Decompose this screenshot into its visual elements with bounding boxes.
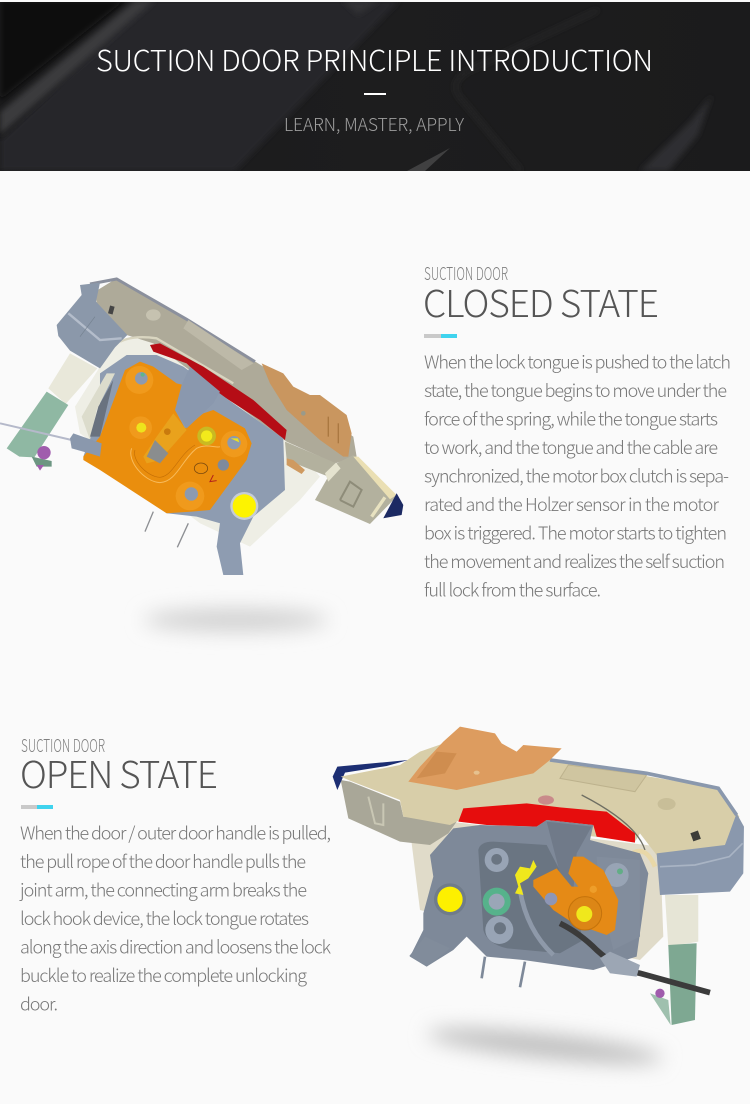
open state paragraph: lock hook device, the lock tongue rotates xyxy=(20,905,309,931)
yellow clip xyxy=(515,860,537,895)
red latch plate xyxy=(150,343,287,440)
white cylinder xyxy=(48,353,97,404)
subtitle: LEARN, MASTER, APPLY xyxy=(284,112,464,137)
title divider xyxy=(364,93,386,95)
navy edge xyxy=(333,760,408,790)
title: SUCTION DOOR PRINCIPLE INTRODUCTION xyxy=(96,38,653,80)
tan connector xyxy=(262,363,352,457)
panel: closed state text xyxy=(423,260,731,603)
open state paragraph: buckle to realize the complete unlocking xyxy=(20,962,307,988)
end cap xyxy=(57,283,127,368)
illustration: closed state latch xyxy=(0,278,403,575)
open state accent bar xyxy=(21,805,53,809)
red latch plate xyxy=(458,803,635,843)
cable clamp xyxy=(600,952,640,977)
closed state paragraph: box is triggered. The motor starts to tighten xyxy=(424,520,727,546)
orange inner tongue xyxy=(143,413,187,463)
left gray side xyxy=(341,780,457,845)
pins xyxy=(145,512,188,547)
closed state paragraph: full lock from the surface. xyxy=(424,577,601,603)
bolt holes xyxy=(125,366,247,510)
closed state paragraph xyxy=(424,349,731,603)
closed state heading: CLOSED STATE xyxy=(423,274,659,328)
open state paragraph: the pull rope of the door handle pulls the xyxy=(20,848,306,874)
handle tab xyxy=(409,937,450,967)
cable end fitting xyxy=(0,423,102,457)
closed state paragraph: to work, and the tongue and the cable are xyxy=(424,434,718,460)
large yellow stud xyxy=(230,492,258,520)
closed state paragraph: the movement and realizes the self suction xyxy=(424,548,725,574)
green post xyxy=(650,943,697,1025)
green post xyxy=(7,392,68,457)
illustration: open state latch xyxy=(333,727,744,1025)
orange lever xyxy=(533,857,618,935)
wedge xyxy=(547,822,592,890)
closed state shadow xyxy=(144,609,328,631)
open state kicker: SUCTION DOOR xyxy=(21,732,105,758)
tan connector xyxy=(408,727,562,790)
closed state paragraph: state, the tongue begins to move under the xyxy=(424,377,727,403)
lower shell xyxy=(285,442,397,524)
drive cable xyxy=(560,923,710,993)
open state paragraph: When the door / outer door handle is pulled, xyxy=(20,820,331,846)
closed state paragraph: When the lock tongue is pushed to the latch xyxy=(424,349,731,375)
purple bolt xyxy=(37,446,51,471)
closed state kicker: SUCTION DOOR xyxy=(424,260,508,286)
closed state accent bar xyxy=(424,334,457,338)
end cap xyxy=(657,813,744,895)
green spring ring xyxy=(483,888,511,916)
large yellow stud xyxy=(434,883,466,915)
top plate xyxy=(95,278,357,464)
gray housing xyxy=(410,820,648,970)
closed state paragraph: synchronized, the motor box clutch is sepa- xyxy=(424,463,729,489)
closed state paragraph: force of the spring, while the tongue starts xyxy=(424,406,718,432)
open state heading: OPEN STATE xyxy=(20,745,218,799)
curved groove xyxy=(131,446,220,483)
open state paragraph xyxy=(19,820,332,1016)
cylinder xyxy=(665,895,698,947)
pins xyxy=(482,957,525,987)
pale inner carrier xyxy=(75,335,320,547)
panel: open state text xyxy=(19,732,332,1016)
gray wedge xyxy=(175,367,220,428)
inner recess xyxy=(478,842,583,953)
header banner xyxy=(0,0,750,171)
orange lock plate xyxy=(83,362,252,513)
plate rim xyxy=(550,760,737,815)
gray mount plate xyxy=(83,355,285,575)
stamped logo and L mark xyxy=(194,463,217,482)
closed state paragraph: rated and the Holzer sensor in the motor xyxy=(424,491,720,517)
open state paragraph: joint arm, the connecting arm breaks the xyxy=(19,876,307,902)
navy tip xyxy=(383,493,403,518)
beige top plate xyxy=(341,740,739,855)
open state shadow xyxy=(426,1022,664,1070)
open state paragraph: along the axis direction and loosens the lock xyxy=(20,934,332,960)
cream lower carrier xyxy=(408,817,663,960)
slot opening xyxy=(147,440,168,463)
open state paragraph: door. xyxy=(20,990,58,1016)
guide holes xyxy=(485,848,629,944)
lever pivot xyxy=(568,897,602,930)
